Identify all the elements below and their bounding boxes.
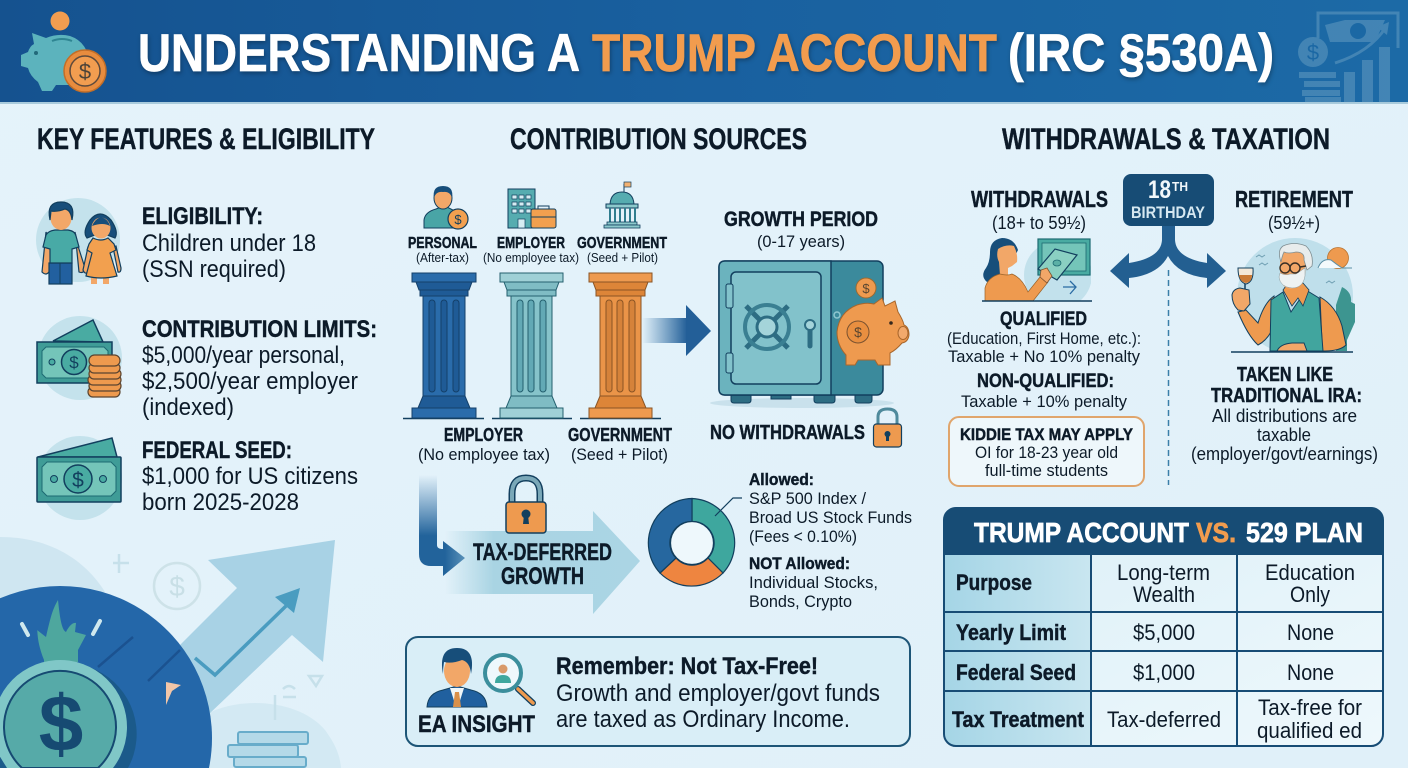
- icon: federal seed cash: [37, 436, 122, 520]
- text: eligibility: (SSN required): [142, 256, 286, 283]
- badge: 18th birthday: BIRTHDAY: [1131, 203, 1206, 222]
- row: tax treatment: [952, 695, 1362, 743]
- row: purpose: Only: [1290, 582, 1330, 607]
- row: federal seed: Federal Seed: [956, 660, 1076, 685]
- text: allowed investments: [749, 470, 912, 611]
- title: [138, 24, 1274, 83]
- text: growth period: GROWTH PERIOD: [724, 208, 878, 231]
- callout: kiddie tax: [949, 417, 1144, 486]
- panel: contribution sources: [403, 182, 912, 746]
- callout: kiddie tax: OI for 18-23 year old: [975, 444, 1118, 462]
- text: allowed investments: Individual Stocks,: [749, 573, 878, 592]
- text: eligibility: Children under 18: [142, 230, 316, 257]
- text: withdrawals heading: (18+ to 59½): [992, 213, 1086, 233]
- icon: personal: [424, 186, 468, 229]
- labels: top sources: (After-tax): [416, 251, 469, 265]
- arrow: elbow down to tax-deferred: [419, 475, 465, 576]
- heading: key features: KEY FEATURES & ELIGIBILITY: [37, 123, 375, 156]
- row: yearly limit: Yearly Limit: [956, 620, 1067, 645]
- text: federal seed: $1,000 for US citizens: [142, 463, 358, 490]
- title: (IRC §530A): [1008, 24, 1274, 83]
- text: retirement rules: (employer/govt/earnings): [1191, 444, 1378, 464]
- row: purpose: Long-term: [1117, 560, 1210, 585]
- labels: bottom sources: (No employee tax): [418, 445, 550, 464]
- title: TRUMP ACCOUNT: [592, 24, 997, 83]
- callout: EA insight: EA INSIGHT: [418, 711, 535, 738]
- pillar: teal: [492, 273, 572, 418]
- text: withdrawals heading: WITHDRAWALS: [971, 186, 1108, 212]
- table title: VS.: [1196, 517, 1236, 548]
- donut chart: [648, 498, 742, 586]
- icon: faded money and growth chart: [1298, 13, 1398, 103]
- icon: piggy bank with coins: [21, 12, 106, 92]
- icon: magnifying glass: [485, 655, 533, 703]
- row: purpose: Education: [1265, 560, 1355, 585]
- icon: safe with piggy bank: $: [862, 281, 870, 296]
- row: yearly limit: None: [1287, 620, 1334, 645]
- icon: cash and coins: [37, 316, 122, 400]
- callout: kiddie tax: KIDDIE TAX MAY APPLY: [960, 425, 1134, 444]
- text: retirement heading: RETIREMENT: [1235, 186, 1353, 212]
- label: tax-deferred growth: [473, 539, 612, 590]
- row: tax treatment: Tax-free for: [1258, 695, 1362, 720]
- panel: withdrawals and taxation: [944, 174, 1383, 746]
- text: retirement heading: [1235, 186, 1353, 233]
- badge: 18th birthday: 18: [1148, 176, 1171, 204]
- pillar: blue: [403, 273, 484, 418]
- row: yearly limit: $5,000: [1133, 620, 1195, 645]
- text: eligibility: [142, 203, 316, 283]
- text: allowed investments: S&P 500 Index /: [749, 489, 866, 508]
- icon: small padlock: [874, 409, 902, 447]
- callout: EA insight: Growth and employer/govt funds: [556, 680, 880, 707]
- label: tax-deferred growth: GROWTH: [501, 563, 584, 590]
- heading: withdrawals and taxation: WITHDRAWALS & TAXATION: [1002, 123, 1330, 156]
- icon: federal seed cash: $: [72, 469, 84, 492]
- icon: large padlock: [506, 478, 546, 533]
- text: retirement rules: All distributions are: [1212, 406, 1357, 426]
- label: no withdrawals: NO WITHDRAWALS: [710, 422, 865, 444]
- text: contribution limits: [142, 316, 377, 421]
- panel: key features: [36, 198, 377, 520]
- text: allowed investments: (Fees < 0.10%): [749, 527, 857, 546]
- labels: top sources: [408, 235, 667, 265]
- callout: EA insight: are taxed as Ordinary Income.: [556, 706, 850, 733]
- table title: 529 PLAN: [1246, 517, 1363, 548]
- arrow: fork at 18th birthday: [1110, 226, 1226, 485]
- text: allowed investments: Broad US Stock Funds: [749, 508, 912, 527]
- row: tax treatment: qualified ed: [1257, 718, 1362, 743]
- text: qualified rules: Taxable + 10% penalty: [961, 392, 1127, 411]
- text: contribution limits: $5,000/year personal,: [142, 342, 345, 369]
- icon: personal: $: [454, 212, 462, 227]
- pillar: orange: [580, 273, 661, 418]
- labels: bottom sources: EMPLOYER: [444, 425, 523, 445]
- row: purpose: Wealth: [1133, 582, 1195, 607]
- text: withdrawals heading: [971, 186, 1108, 233]
- comparison table: [944, 508, 1383, 746]
- row: tax treatment: Tax-deferred: [1107, 707, 1221, 732]
- text: qualified rules: NON-QUALIFIED:: [977, 371, 1114, 392]
- title: UNDERSTANDING A: [138, 24, 580, 83]
- row: tax treatment: Tax Treatment: [952, 707, 1085, 732]
- table title: [974, 517, 1363, 548]
- text: federal seed: [142, 437, 358, 516]
- icon: government: [604, 182, 640, 228]
- labels: top sources: GOVERNMENT: [577, 235, 667, 252]
- labels: bottom sources: (Seed + Pilot): [571, 445, 668, 464]
- text: qualified rules: [947, 309, 1141, 411]
- label: tax-deferred growth: TAX-DEFERRED: [473, 539, 612, 566]
- row: federal seed: [956, 660, 1334, 685]
- text: retirement heading: (59½+): [1268, 213, 1320, 233]
- arrow: tax-deferred growth: [445, 511, 640, 614]
- labels: bottom sources: [418, 425, 672, 464]
- icon: woman with cash: [982, 238, 1092, 309]
- arrow: to growth period: [642, 305, 711, 356]
- icon: safe with piggy bank: $: [854, 324, 862, 340]
- icon: employer: [508, 189, 556, 228]
- labels: top sources: (No employee tax): [483, 251, 579, 265]
- text: retirement rules: TAKEN LIKE: [1237, 364, 1333, 386]
- text: qualified rules: Taxable + No 10% penalty: [948, 347, 1140, 366]
- row: purpose: Purpose: [956, 570, 1032, 595]
- row: federal seed: $1,000: [1133, 660, 1195, 685]
- text: allowed investments: Bonds, Crypto: [749, 592, 852, 611]
- header banner: [0, 0, 1408, 104]
- row: yearly limit: [956, 620, 1334, 645]
- callout: EA insight: [406, 637, 910, 746]
- text: qualified rules: (Education, First Home, etc.):: [947, 329, 1141, 348]
- background decoration: growth arrow and coin: $: [39, 679, 83, 768]
- icon: advisor: [427, 648, 487, 707]
- text: retirement rules: TRADITIONAL IRA:: [1211, 385, 1362, 407]
- text: growth period: [724, 208, 878, 251]
- text: contribution limits: (indexed): [142, 394, 234, 421]
- text: eligibility: ELIGIBILITY:: [142, 203, 263, 230]
- background decoration: growth arrow and coin: $: [169, 571, 185, 602]
- text: federal seed: born 2025-2028: [142, 489, 299, 516]
- text: federal seed: FEDERAL SEED:: [142, 437, 292, 464]
- text: retirement rules: taxable: [1257, 425, 1311, 445]
- callout: kiddie tax: full-time students: [985, 462, 1108, 480]
- row: federal seed: None: [1287, 660, 1334, 685]
- icon: piggy bank with coins: $: [79, 59, 91, 84]
- badge: 18th birthday: TH: [1172, 179, 1188, 194]
- labels: top sources: PERSONAL: [408, 235, 477, 252]
- badge: 18th birthday: [1123, 174, 1214, 226]
- text: contribution limits: $2,500/year employer: [142, 368, 358, 395]
- table title: TRUMP ACCOUNT: [974, 517, 1189, 548]
- labels: top sources: (Seed + Pilot): [587, 251, 658, 265]
- text: allowed investments: Allowed:: [749, 470, 814, 489]
- callout: EA insight: Remember: Not Tax-Free!: [556, 653, 818, 680]
- text: contribution limits: CONTRIBUTION LIMITS:: [142, 316, 377, 343]
- icon: cash and coins: $: [69, 353, 79, 372]
- icon: children: [36, 198, 121, 284]
- text: growth period: (0-17 years): [757, 232, 845, 251]
- labels: top sources: EMPLOYER: [497, 235, 565, 252]
- text: allowed investments: NOT Allowed:: [749, 554, 850, 573]
- heading: contribution sources: CONTRIBUTION SOURCES: [510, 123, 807, 156]
- icon: faded money and growth chart: $: [1307, 40, 1319, 65]
- text: qualified rules: QUALIFIED: [1000, 309, 1087, 330]
- icon: retiree with wine glass: [1231, 238, 1355, 354]
- text: retirement rules: [1191, 364, 1378, 464]
- row: purpose: [956, 560, 1355, 607]
- icon: safe with piggy bank: [710, 261, 909, 408]
- background decoration: growth arrow and coin: [0, 537, 341, 768]
- labels: bottom sources: GOVERNMENT: [568, 425, 672, 445]
